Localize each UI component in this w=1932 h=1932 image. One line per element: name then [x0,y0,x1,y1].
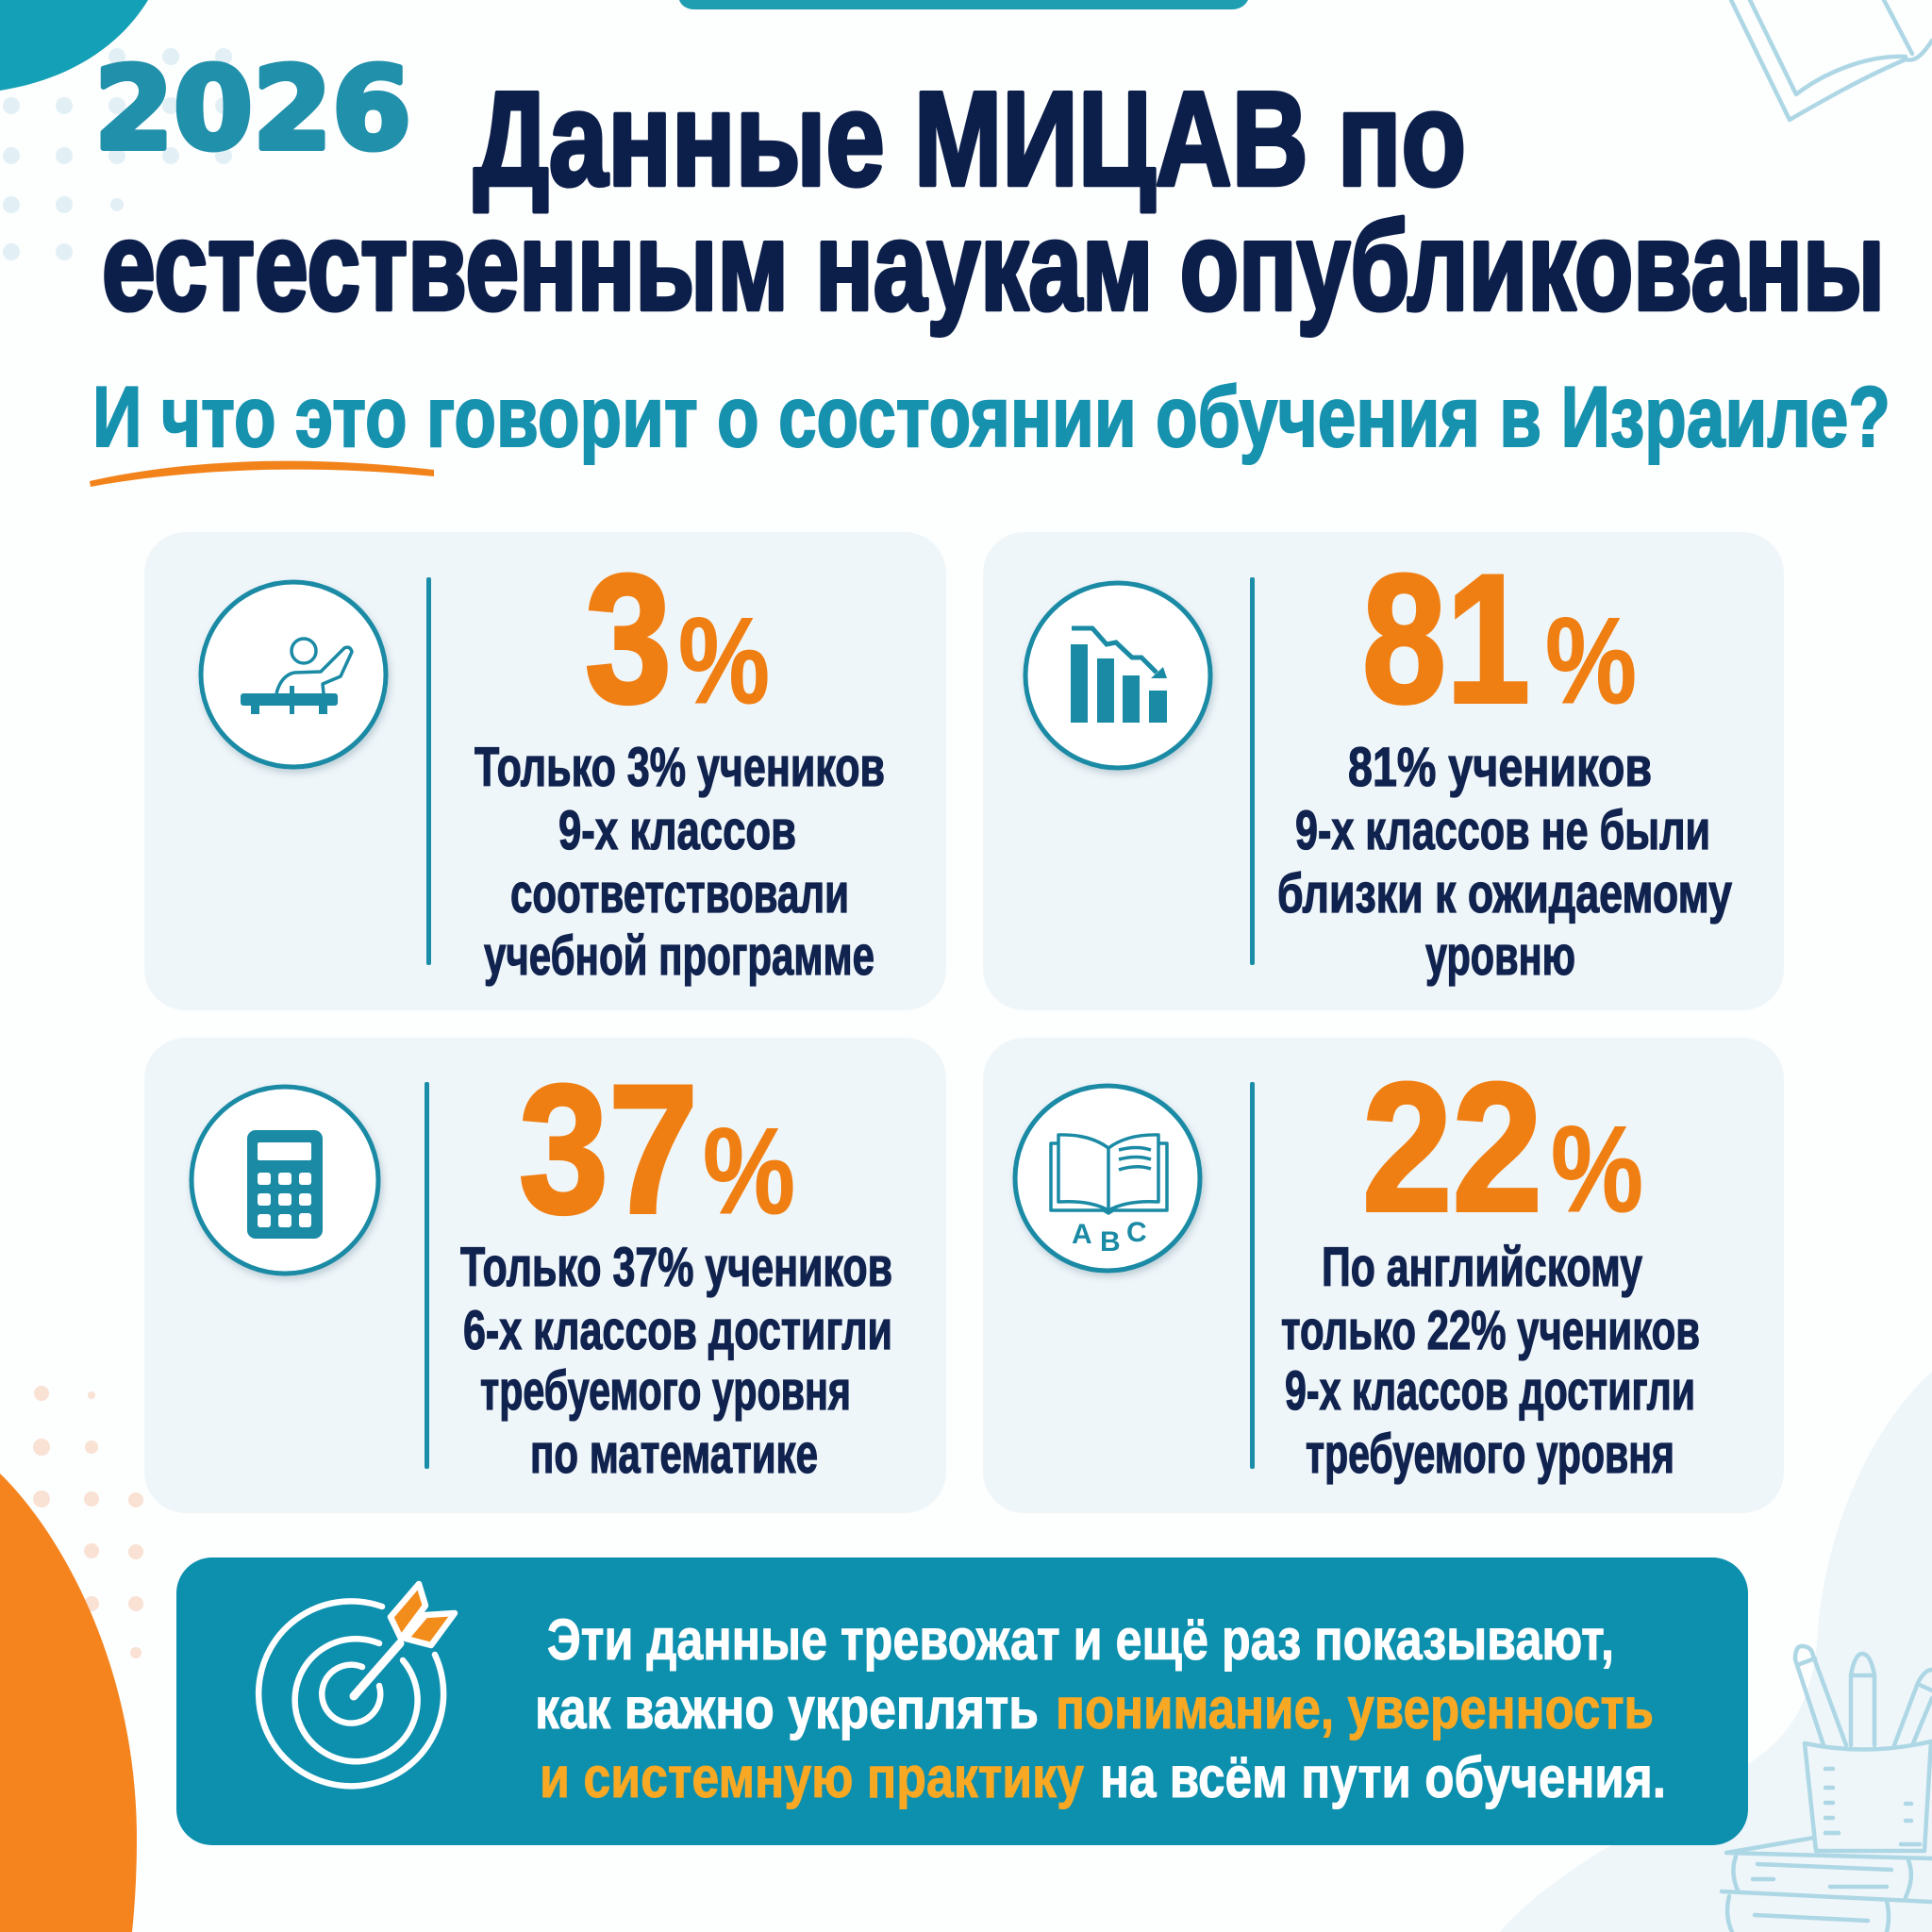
orange underline [90,461,434,487]
description [1277,737,1732,987]
banner text: как важно укреплять [535,1676,1039,1740]
banner text [535,1607,1666,1809]
description: требуемого уровня [480,1360,851,1422]
decoration: open book outline top right [1731,0,1932,120]
card background [983,1038,1784,1513]
description: 9-х классов не были [1295,800,1710,861]
divider [426,577,431,965]
year label: 2026 [94,44,411,175]
icon: student raising hand at desk [201,582,386,767]
panel: 22% [983,1038,1784,1513]
stat: 3%: % [678,591,770,729]
panel: 37% [144,1038,946,1513]
description: 9-х классов [558,800,796,861]
description: уровню [1425,925,1575,987]
description: соответствовали [510,863,849,924]
banner text: Эти данные тревожат и ещё раз показывают, [547,1607,1614,1672]
icon: open book with ABC [1015,1086,1200,1271]
decoration: top teal bar [679,0,1248,9]
decoration: dots bottom left [33,1386,143,1658]
title [102,64,1885,337]
description: по математике [530,1424,818,1485]
panel: 81% [983,532,1784,1010]
description [460,1237,892,1485]
card background [983,532,1784,1010]
panel: 3% [144,532,946,1010]
banner text: на всём пути обучения. [1100,1745,1666,1809]
stat: 37%: % [703,1102,795,1240]
banner text: и системную практику [540,1745,1084,1809]
decoration: teal corner blob [0,0,148,91]
stat: 81%: 81 [1362,537,1530,741]
description [1281,1237,1700,1485]
panel: conclusion banner [176,1557,1748,1845]
stat: 22%: 22 [1362,1045,1542,1250]
description: Только 37% учеников [460,1237,892,1298]
description: Только 3% учеников [475,737,885,798]
description: 6-х классов достигли [463,1300,892,1361]
decoration: dots top left [3,48,232,260]
stat: 81%: % [1545,591,1637,729]
icon: open book with ABC: C [1126,1217,1147,1248]
icon: target with arrow [258,1584,455,1786]
stat: 37%: 37 [519,1047,698,1252]
description: учебной программе [484,925,874,987]
description: 81% учеников [1348,737,1652,798]
icon: open book with ABC: B [1100,1226,1121,1257]
divider [425,1082,429,1469]
title: Данные МИЦАВ по [474,64,1466,214]
icon: open book with ABC: A [1072,1219,1092,1250]
description: 9-х классов достигли [1285,1360,1695,1422]
icon: falling bar chart [1025,583,1210,768]
stat: 3% [585,537,770,741]
stat: 3%: 3 [585,537,672,741]
banner text: понимание, уверенность [1056,1676,1654,1740]
description [475,737,885,987]
description: только 22% учеников [1281,1300,1700,1361]
icon: calculator [192,1087,378,1274]
decoration: orange blob bottom left [0,1474,137,1932]
decoration: books and pencil cup bottom right [1722,1646,1932,1932]
description: требуемого уровня [1306,1424,1674,1485]
description: По английскому [1322,1237,1642,1298]
description: близки к ожидаемому [1277,863,1732,924]
banner background [176,1557,1748,1845]
divider [1250,1082,1255,1469]
stat: 22%: % [1551,1100,1643,1238]
divider [1250,577,1255,965]
card background [144,1038,946,1513]
decoration: pale blob bottom right [1500,1372,1932,1932]
card background [144,532,946,1010]
